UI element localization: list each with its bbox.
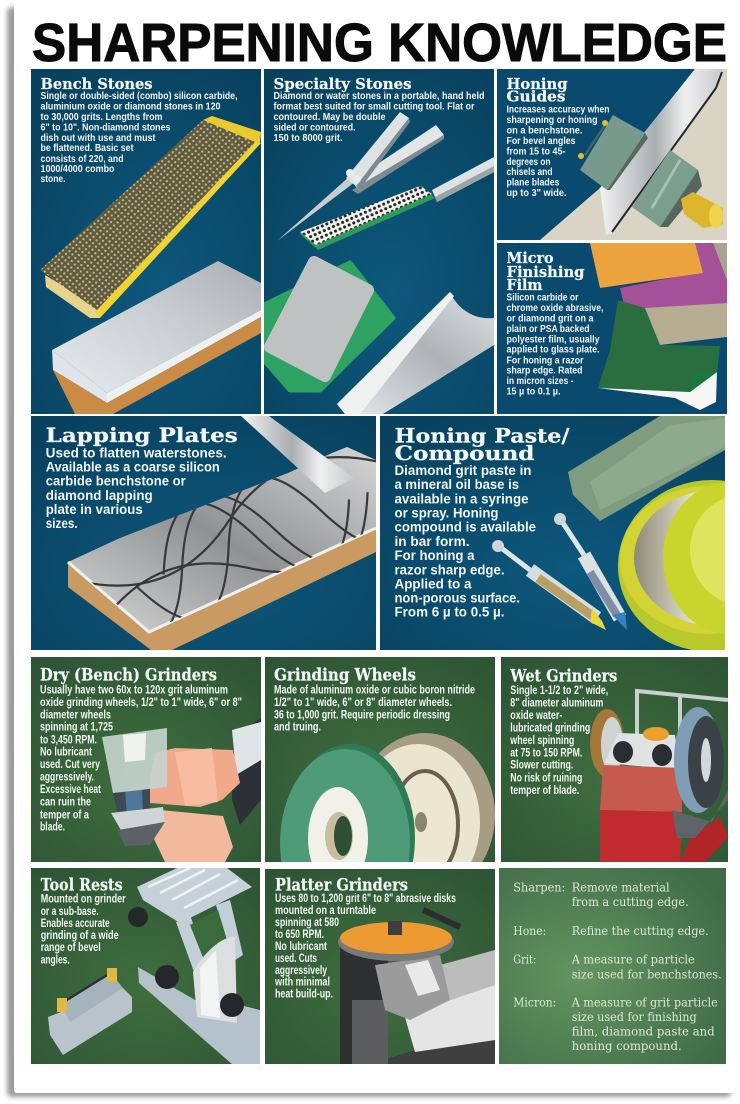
text: micro finishing film: sharp edge. Rated	[506, 366, 582, 377]
text: honing guides: up to 3" wide.	[506, 188, 567, 199]
text: dry bench grinders: used. Cut very	[40, 759, 100, 771]
definition: micron: film, diamond paste and	[572, 1025, 715, 1039]
text: dry bench grinders: Excessive heat	[40, 784, 101, 796]
definition: sharpen: Remove material	[572, 881, 670, 895]
text: tool rests: grinding of a wide	[41, 930, 119, 942]
heading: micro finishing film: Film	[506, 276, 543, 294]
text: bench stones: 1000/4000 combo	[40, 164, 114, 175]
illustration: platter grinder	[338, 910, 495, 1064]
panel: definitions	[499, 868, 726, 1064]
text: bench stones: to 30,000 grits. Lengths from	[40, 112, 163, 123]
definition: sharpen	[513, 881, 689, 909]
illustration: compound bar, tin and syringes	[492, 416, 740, 652]
text: platter grinders: Uses 80 to 1,200 grit 6" to 8" abrasive disks	[275, 893, 456, 905]
illustration: wet grinder	[590, 691, 728, 862]
text: grinding wheels: and truing.	[274, 722, 321, 734]
text: dry bench grinders: temper of a	[40, 809, 89, 821]
definition: sharpen: from a cutting edge.	[572, 895, 689, 909]
heading: micro finishing film: Finishing	[506, 263, 585, 281]
text: honing guides	[506, 105, 610, 199]
text: wet grinders	[510, 685, 608, 797]
text: platter grinders: heat build-up.	[275, 989, 333, 1001]
heading: honing paste and compound: Honing Paste/	[394, 424, 570, 448]
text: grinding wheels: 1/2" to 1" wide, 6" or 8" diameter wheels.	[274, 697, 452, 709]
text: honing paste and compound: in bar form.	[394, 534, 470, 549]
text: honing paste and compound: Diamond grit paste in	[394, 463, 532, 478]
text: specialty stones: Diamond or water stones in a portable, hand held	[274, 91, 484, 102]
panel: dry bench grinders	[31, 657, 261, 862]
text: honing guides: plane blades	[506, 178, 560, 188]
icon: syringe with blue paste	[554, 513, 627, 630]
text: grinding wheels: 36 to 1,000 grit. Require periodic dressing	[274, 709, 450, 721]
text: lapping plates: sizes.	[46, 516, 78, 531]
text: honing paste and compound	[394, 463, 536, 620]
text: dry bench grinders: diameter wheels	[40, 709, 111, 721]
heading: wet grinders: Wet Grinders	[509, 666, 617, 686]
heading: honing guides	[506, 75, 568, 106]
text: dry bench grinders	[40, 684, 242, 834]
illustration: tool rests	[48, 868, 260, 1065]
text: bench stones: Single or double-sided (combo) silicon carbide,	[40, 91, 238, 102]
text: platter grinders: used. Cuts	[275, 953, 317, 965]
illustration: honing guide and blade	[540, 69, 727, 240]
text: platter grinders: aggressively	[275, 965, 327, 977]
heading: honing paste and compound	[394, 424, 570, 465]
text: honing paste and compound: compound is available	[394, 520, 536, 535]
text: honing paste and compound: For honing a	[394, 548, 475, 563]
text: honing paste and compound: razor sharp edge.	[394, 562, 504, 577]
definition: grit: Grit:	[513, 952, 536, 966]
panel: micro finishing film	[497, 243, 727, 414]
heading: bench stones: Bench Stones	[40, 75, 152, 93]
text: dry bench grinders: to 3,450 RPM.	[40, 734, 97, 746]
heading: platter grinders: Platter Grinders	[275, 876, 408, 896]
text: wet grinders: No risk of ruining	[510, 772, 582, 784]
text: wet grinders: Slower cutting.	[510, 760, 573, 772]
heading: tool rests: Tool Rests	[41, 876, 123, 896]
text: grinding wheels: Made of aluminum oxide or cubic boron nitride	[274, 684, 475, 696]
text: dry bench grinders: spinning at 1,725	[40, 722, 113, 734]
panel: specialty stones	[264, 69, 494, 414]
text: lapping plates: Available as a coarse silicon	[46, 460, 220, 475]
text: platter grinders: spinning at 580	[275, 917, 339, 929]
text: bench stones	[40, 91, 238, 185]
text: specialty stones: format best suited for small cutting tool. Flat or	[274, 102, 475, 113]
text: platter grinders: to 650 RPM.	[275, 929, 324, 941]
definition: grit	[513, 952, 722, 981]
text: wet grinders: at 75 to 150 RPM.	[510, 747, 582, 759]
text: micro finishing film: 15 µ to 0.1 µ.	[506, 386, 561, 397]
text: honing guides: degrees on	[506, 157, 550, 168]
text: honing guides: Increases accuracy when	[506, 105, 610, 116]
text: micro finishing film: or diamond grit on a	[506, 314, 594, 324]
text: tool rests	[41, 894, 126, 966]
text: dry bench grinders: aggressively.	[40, 772, 94, 784]
text: honing guides: on a benchstone.	[506, 126, 583, 136]
definition: grit: size used for benchstones.	[572, 967, 722, 981]
text: honing guides: For bevel angles	[506, 136, 576, 147]
text: specialty stones: contoured. May be double	[274, 112, 386, 123]
illustration: folding files, plate and slip stone	[264, 112, 494, 414]
text: wet grinders: wheel spinning	[510, 735, 574, 747]
heading: micro finishing film	[506, 249, 585, 294]
definition: micron	[513, 996, 718, 1053]
text: honing paste and compound: non-porous surface.	[394, 591, 520, 606]
definition: hone: Hone:	[513, 924, 546, 938]
text: specialty stones: 150 to 8000 grit.	[274, 133, 343, 144]
text: wet grinders: Single 1-1/2 to 2" wide,	[510, 685, 608, 697]
text: specialty stones: sided or contoured.	[274, 122, 356, 134]
text: micro finishing film: For honing a razor	[506, 355, 584, 366]
text: bench stones: consists of 220, and	[40, 154, 124, 165]
illustration: lapping plate and scraper	[67, 416, 376, 650]
text: bench stones: aluminium oxide or diamond stones in 120	[40, 102, 221, 113]
text: honing paste and compound: From 6 µ to 0.5 µ.	[394, 605, 504, 620]
text: bench stones: dish out with use and must	[40, 133, 156, 144]
panel: honing guides	[497, 69, 727, 240]
definition: sharpen: Sharpen:	[513, 881, 565, 895]
text: wet grinders: oxide water-	[510, 710, 562, 722]
definition: micron: A measure of grit particle	[571, 996, 718, 1010]
panel: wet grinders	[501, 657, 728, 862]
text: honing guides: chisels and	[506, 167, 552, 178]
panel: honing paste and compound	[380, 416, 740, 652]
definition: micron: size used for finishing	[572, 1010, 697, 1024]
text: lapping plates: diamond lapping	[46, 488, 153, 503]
text: dry bench grinders: can ruin the	[40, 797, 91, 809]
text: platter grinders: No lubricant	[275, 941, 327, 953]
text: tool rests: range of bevel	[41, 942, 101, 954]
heading: specialty stones: Specialty Stones	[274, 75, 412, 93]
illustration: diamond and combo bench stones	[40, 116, 261, 414]
text: platter grinders: with minimal	[274, 977, 330, 989]
heading: honing paste and compound: Compound	[394, 441, 535, 465]
text: bench stones: 6" to 10". Non-diamond stones	[40, 122, 171, 134]
text: wet grinders: lubricated grinding	[510, 722, 590, 734]
text: micro finishing film: applied to glass plate.	[506, 345, 600, 356]
definition: micron: honing compound.	[572, 1039, 682, 1053]
text: platter grinders: mounted on a turntable	[275, 905, 376, 917]
text: micro finishing film: plain or PSA backed	[506, 324, 590, 335]
text: tool rests: angles.	[41, 954, 70, 966]
panel: lapping plates	[31, 416, 376, 650]
panel: bench stones	[31, 69, 261, 414]
text: dry bench grinders: blade.	[40, 822, 65, 834]
panel: platter grinders	[265, 869, 495, 1064]
definition: hone	[513, 924, 709, 938]
text: micro finishing film: Silicon carbide or	[506, 292, 579, 304]
panel: tool rests	[31, 868, 260, 1065]
text: lapping plates: Used to flatten waterstones.	[46, 446, 227, 461]
heading: grinding wheels: Grinding Wheels	[274, 666, 416, 686]
text: lapping plates: carbide benchstone or	[46, 474, 186, 489]
text: wet grinders: temper of blade.	[510, 785, 579, 797]
text: honing paste and compound: a mineral oil base is	[394, 477, 519, 492]
text: honing guides: sharpening or honing	[506, 115, 598, 126]
text: honing paste and compound: Applied to a	[394, 576, 472, 591]
text: micro finishing film	[506, 292, 604, 397]
heading: honing guides: Honing	[506, 75, 568, 93]
text: honing guides: from 15 to 45-	[506, 146, 566, 158]
heading: micro finishing film: Micro	[506, 249, 554, 267]
text: grinding wheels	[274, 684, 475, 734]
heading: honing guides: Guides	[506, 88, 566, 106]
text: tool rests: Mounted on grinder	[41, 894, 126, 906]
panel: grinding wheels	[265, 657, 495, 862]
illustration: bench grinder	[102, 718, 261, 862]
text: honing paste and compound: or spray. Honing	[394, 506, 498, 521]
text: dry bench grinders: No lubricant	[40, 747, 92, 759]
text: platter grinders	[274, 893, 456, 1001]
text: tool rests: Enables accurate	[41, 918, 110, 930]
text: dry bench grinders: Usually have two 60x to 120x grit aluminum	[40, 684, 228, 696]
heading: dry bench grinders: Dry (Bench) Grinders	[40, 666, 217, 686]
text: micro finishing film: polyester film, usually	[506, 334, 600, 345]
text: lapping plates: plate in various	[46, 502, 143, 517]
text: specialty stones	[274, 91, 484, 144]
text: lapping plates	[46, 446, 227, 531]
icon: syringe with tan paste	[492, 540, 606, 630]
text: dry bench grinders: oxide grinding wheels, 1/2" to 1" wide, 6" or 8"	[40, 697, 242, 709]
heading: lapping plates: Lapping Plates	[46, 423, 238, 447]
definition: grit: A measure of particle	[571, 952, 695, 966]
text: bench stones: be flattened. Basic set	[40, 143, 134, 154]
definition: micron: Micron:	[513, 996, 556, 1010]
text: micro finishing film: in micron sizes -	[506, 376, 574, 387]
definition: hone: Refine the cutting edge.	[572, 924, 709, 938]
illustration: green and cream grinding wheels	[280, 733, 495, 862]
text: bench stones: stone.	[40, 174, 66, 185]
text: micro finishing film: chrome oxide abrasive,	[506, 303, 604, 314]
text: wet grinders: 8" diameter aluminum	[510, 698, 603, 710]
text: tool rests: or a sub-base.	[41, 906, 99, 918]
illustration: abrasive film sheets	[590, 243, 727, 410]
text: honing paste and compound: available in a syringe	[394, 491, 529, 506]
